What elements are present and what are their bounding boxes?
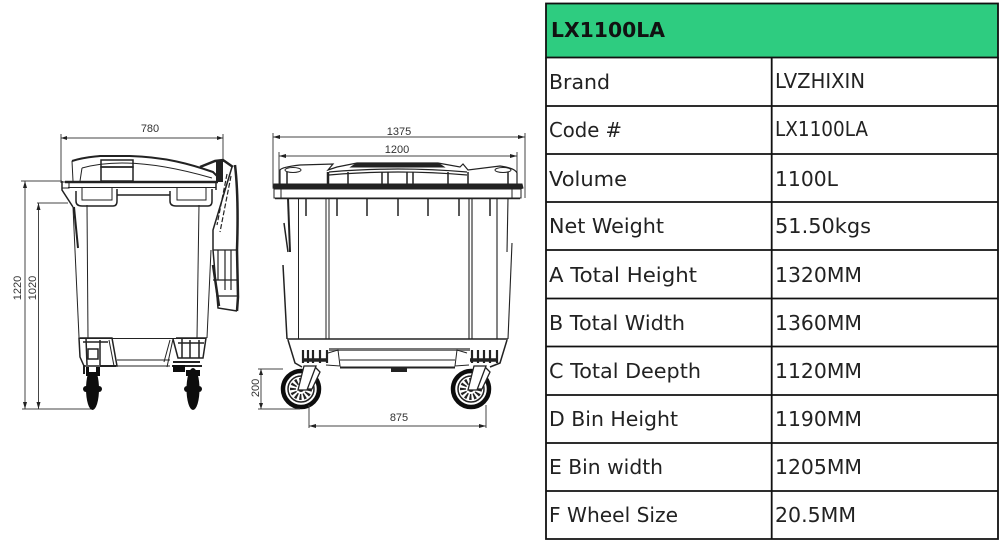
bin base front xyxy=(287,339,508,372)
row: volume: Volume xyxy=(549,167,627,191)
front view drawing of bin xyxy=(250,126,525,428)
row: code xyxy=(549,117,868,142)
row: volume xyxy=(549,167,839,191)
left wheel xyxy=(283,366,320,407)
hinged open lid xyxy=(200,160,238,311)
dimension: 1200 width xyxy=(279,144,517,186)
bin lid front xyxy=(273,163,523,198)
row: brand: LVZHIXIN xyxy=(775,69,865,93)
row: total deepth xyxy=(549,359,862,383)
row: net weight: Net Weight xyxy=(549,214,664,238)
dimension: 200 wheel height xyxy=(250,369,300,409)
specification table xyxy=(546,4,998,539)
row: total width: B Total Width xyxy=(549,311,685,335)
dimension: 1220 height: 1220 xyxy=(12,276,24,300)
row: bin width: 1205MM xyxy=(775,455,862,479)
dimension: 1375 width xyxy=(273,126,525,198)
dimension: 1200 width: 1200 xyxy=(385,144,409,156)
row: wheel size: F Wheel Size xyxy=(549,503,678,527)
bin lid side xyxy=(62,156,218,207)
bin handles side xyxy=(76,188,212,206)
row: code: Code # xyxy=(549,118,622,142)
row: net weight xyxy=(549,214,871,238)
right wheel xyxy=(453,366,490,407)
row: bin height: 1190MM xyxy=(775,407,862,431)
row: total width xyxy=(549,311,862,335)
row: total height xyxy=(549,263,862,287)
dimension: 780 width: 780 xyxy=(141,123,159,135)
row: bin height xyxy=(549,407,862,431)
row: total height: 1320MM xyxy=(775,263,862,287)
dimension: 875 wheel spacing xyxy=(309,405,486,428)
row: bin width xyxy=(549,455,862,479)
dimension: 1375 width: 1375 xyxy=(387,126,411,138)
side view drawing of bin xyxy=(12,123,238,410)
right caster and base xyxy=(164,338,206,410)
row: total deepth: C Total Deepth xyxy=(549,359,701,383)
bin body front with ribs xyxy=(283,198,512,339)
table header: LX1100LA xyxy=(551,18,666,42)
dimension: 1220 height xyxy=(12,181,92,409)
dimension: 200 wheel height: 200 xyxy=(250,379,262,397)
row: net weight: 51.50kgs xyxy=(775,214,871,238)
row: total width: 1360MM xyxy=(775,311,862,335)
table grid xyxy=(546,58,998,539)
row: total height: A Total Height xyxy=(549,263,697,287)
dimension: 1020 height: 1020 xyxy=(27,276,39,300)
row: wheel size xyxy=(549,503,856,527)
dimension: 1020 height xyxy=(27,203,68,409)
row: total deepth: 1120MM xyxy=(775,359,862,383)
row: brand xyxy=(549,69,865,94)
row: volume: 1100L xyxy=(775,167,839,191)
bin body side xyxy=(73,205,211,338)
row: bin height: D Bin Height xyxy=(549,407,678,431)
row: brand: Brand xyxy=(549,70,610,94)
left caster and base xyxy=(79,338,170,410)
row: bin width: E Bin width xyxy=(549,455,663,479)
dimension: 780 width xyxy=(61,123,223,183)
row: code: LX1100LA xyxy=(775,117,868,141)
row: wheel size: 20.5MM xyxy=(775,503,856,527)
table header xyxy=(546,4,998,58)
dimension: 875 wheel spacing: 875 xyxy=(390,412,408,424)
